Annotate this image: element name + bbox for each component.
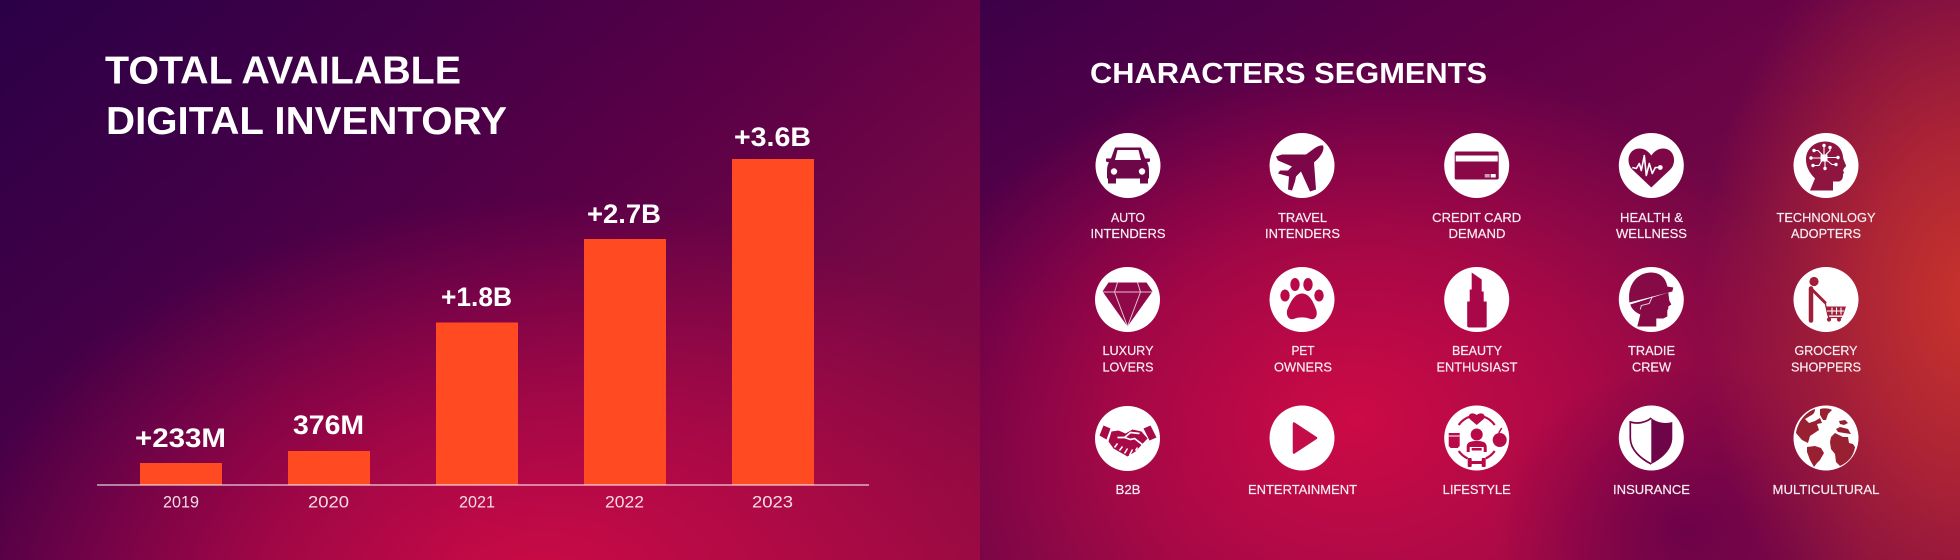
axis line: [97, 484, 869, 486]
icon: lifestyle wheel: [1444, 406, 1509, 470]
label: ADOPTERS: [1791, 226, 1861, 241]
label: [1436, 343, 1518, 374]
label: TRAVEL: [1278, 210, 1327, 225]
segment: beauty enthusiast: [1436, 267, 1518, 374]
segment: entertainment: [1248, 406, 1357, 497]
segment: tradie crew: [1619, 267, 1684, 374]
label: TECHNONLOGY: [1776, 210, 1876, 225]
label: TRADIE: [1628, 343, 1675, 358]
bar 2020: [288, 451, 370, 485]
icon: credit card: [1444, 133, 1509, 198]
heading: CHARACTERS SEGMENTS: [1090, 58, 1487, 90]
label: WELLNESS: [1616, 226, 1687, 241]
value 2023: +3.6B: [734, 122, 811, 152]
icon: car: [1096, 133, 1160, 198]
label: GROCERY: [1794, 343, 1858, 358]
label: LOVERS: [1102, 360, 1154, 374]
label: INTENDERS: [1090, 226, 1166, 241]
bar chart: [97, 122, 869, 512]
label: LUXURY: [1102, 343, 1154, 358]
bar 2019: [140, 463, 222, 485]
title: [105, 50, 507, 143]
icon: play button: [1270, 406, 1334, 470]
label: MULTICULTURAL: [1772, 482, 1880, 497]
segment: pet owners: [1270, 267, 1334, 374]
segment: technology adopters: [1776, 133, 1876, 241]
segment: credit card demand: [1432, 133, 1521, 241]
year 2022: 2022: [605, 492, 644, 512]
label: INTENDERS: [1265, 226, 1340, 241]
bar 2023: [732, 159, 814, 485]
label: [1274, 343, 1332, 374]
label: B2B: [1116, 482, 1140, 497]
label: [1628, 343, 1675, 374]
icon: plane: [1270, 133, 1334, 198]
segment: auto intenders: [1090, 133, 1166, 241]
label: LIFESTYLE: [1443, 482, 1511, 497]
segment: luxury lovers: [1095, 267, 1160, 374]
title: DIGITAL INVENTORY: [106, 100, 507, 143]
segment: multicultural: [1772, 406, 1880, 497]
label: [1776, 210, 1876, 241]
bar 2022: [584, 239, 666, 485]
year 2020: 2020: [308, 492, 349, 512]
label: [1265, 210, 1340, 241]
segment: travel intenders: [1265, 133, 1340, 241]
label: SHOPPERS: [1791, 360, 1861, 374]
label: [1432, 210, 1521, 241]
segment: insurance: [1613, 406, 1690, 497]
value 2022: +2.7B: [587, 199, 661, 229]
label: DEMAND: [1448, 226, 1506, 241]
segment: lifestyle: [1443, 406, 1511, 497]
label: OWNERS: [1274, 360, 1332, 374]
label: CREW: [1632, 360, 1672, 374]
icon: paw: [1270, 267, 1334, 332]
label: [1090, 210, 1166, 241]
title: TOTAL AVAILABLE: [105, 50, 461, 92]
label: INSURANCE: [1613, 482, 1690, 497]
icon: handshake: [1095, 406, 1160, 471]
label: BEAUTY: [1452, 343, 1502, 358]
label: AUTO: [1111, 210, 1145, 225]
segment: health and wellness: [1616, 133, 1687, 241]
label: ENTERTAINMENT: [1248, 482, 1357, 497]
panel: characters segments: [980, 0, 1960, 560]
label: PET: [1292, 343, 1315, 358]
icon: lipstick: [1444, 267, 1509, 332]
icon: diamond: [1095, 267, 1160, 332]
value 2020: 376M: [293, 410, 364, 440]
value 2019: +233M: [135, 423, 226, 453]
year 2021: 2021: [459, 492, 495, 512]
label: [1791, 343, 1861, 374]
year 2019: 2019: [163, 492, 199, 512]
segment: b2b: [1095, 406, 1160, 497]
icon: head with circuit: [1794, 133, 1858, 198]
icon: shield: [1619, 406, 1684, 470]
bar 2021: [436, 322, 518, 485]
year 2023: 2023: [752, 492, 793, 512]
label: CREDIT CARD: [1432, 210, 1521, 225]
panel: total available digital inventory: [0, 0, 980, 560]
icon: shopper with cart: [1794, 267, 1858, 332]
label: [1102, 343, 1154, 374]
icon: heart with pulse: [1619, 133, 1684, 198]
segment: grocery shoppers: [1791, 267, 1861, 374]
icon: head with hard hat: [1619, 267, 1684, 332]
label: [1616, 210, 1687, 241]
label: HEALTH &: [1620, 210, 1683, 225]
label: ENTHUSIAST: [1436, 360, 1518, 374]
value 2021: +1.8B: [441, 282, 512, 312]
icon: globe: [1794, 406, 1858, 470]
